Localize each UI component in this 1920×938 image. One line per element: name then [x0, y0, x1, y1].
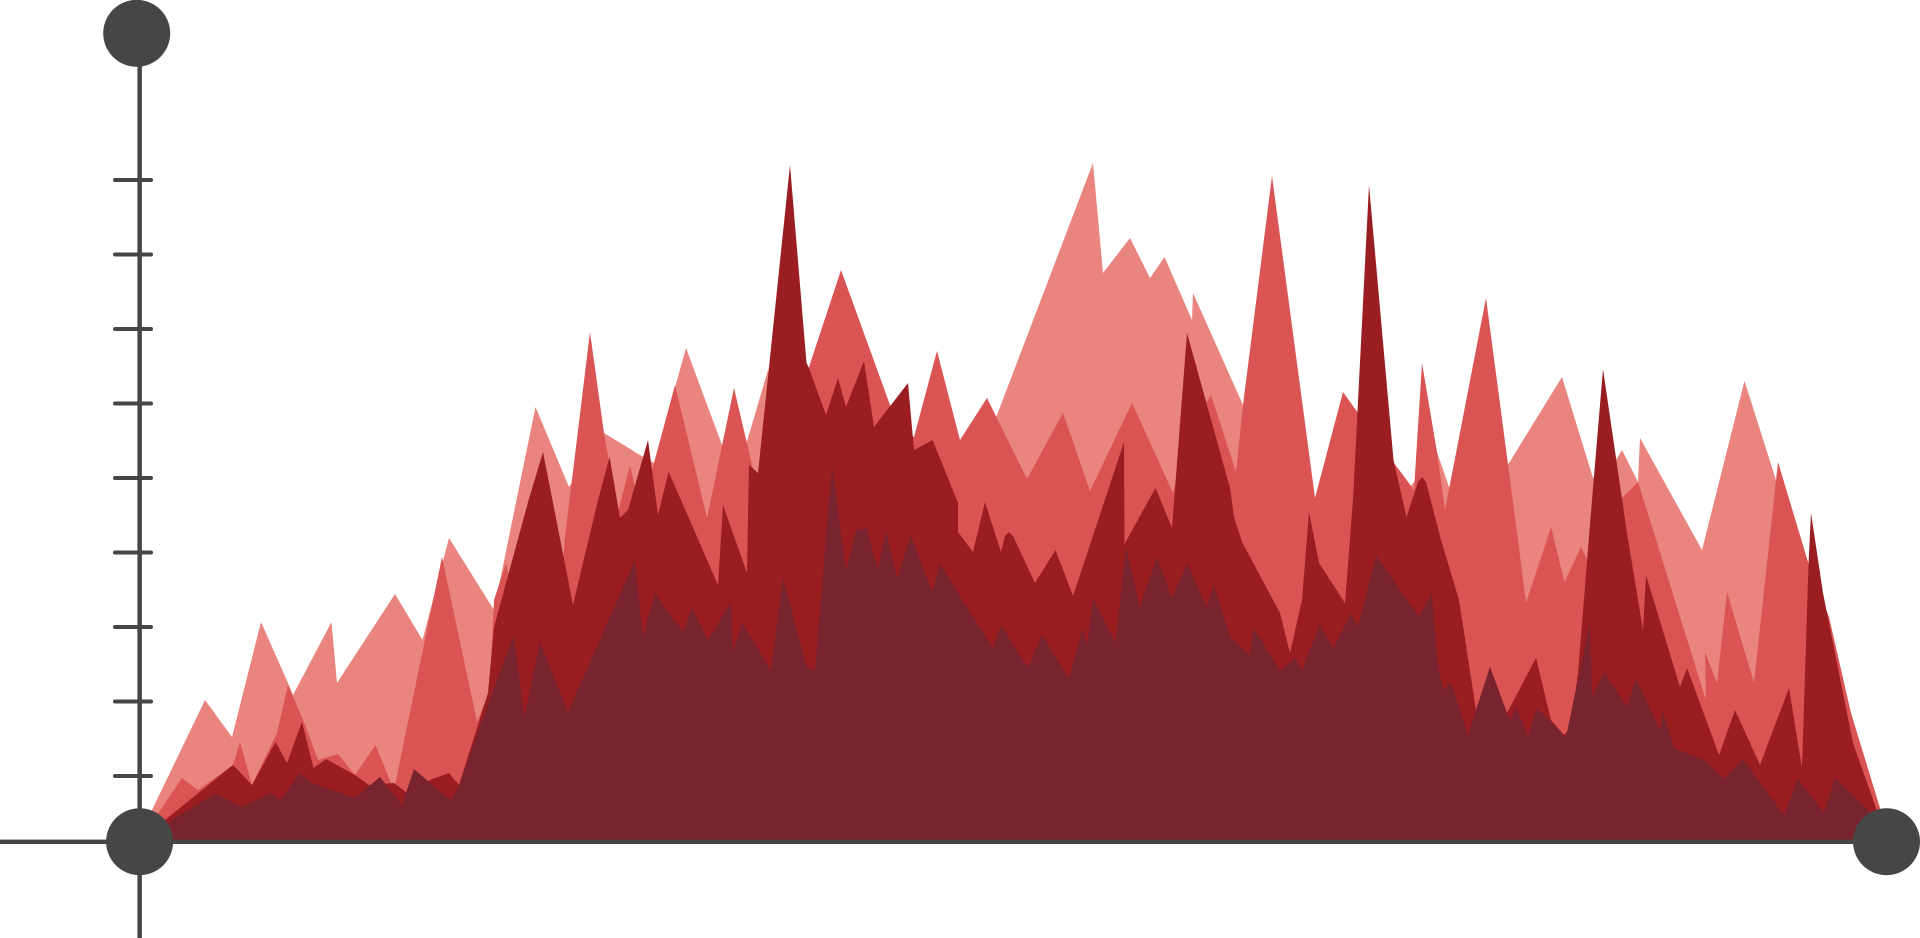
area layer 4: dark maroon — [165, 465, 1880, 842]
area layer 2: medium red — [150, 176, 1886, 842]
area layer 1: light salmon — [150, 163, 1870, 842]
vertical axis line — [137, 33, 142, 938]
axis tick marks — [115, 180, 151, 776]
axis node: origin — [106, 808, 173, 875]
axis node: top — [103, 0, 170, 67]
horizontal axis line — [0, 840, 1886, 844]
axis node: right — [1853, 808, 1920, 875]
area layer 3: deep red — [165, 165, 1880, 842]
